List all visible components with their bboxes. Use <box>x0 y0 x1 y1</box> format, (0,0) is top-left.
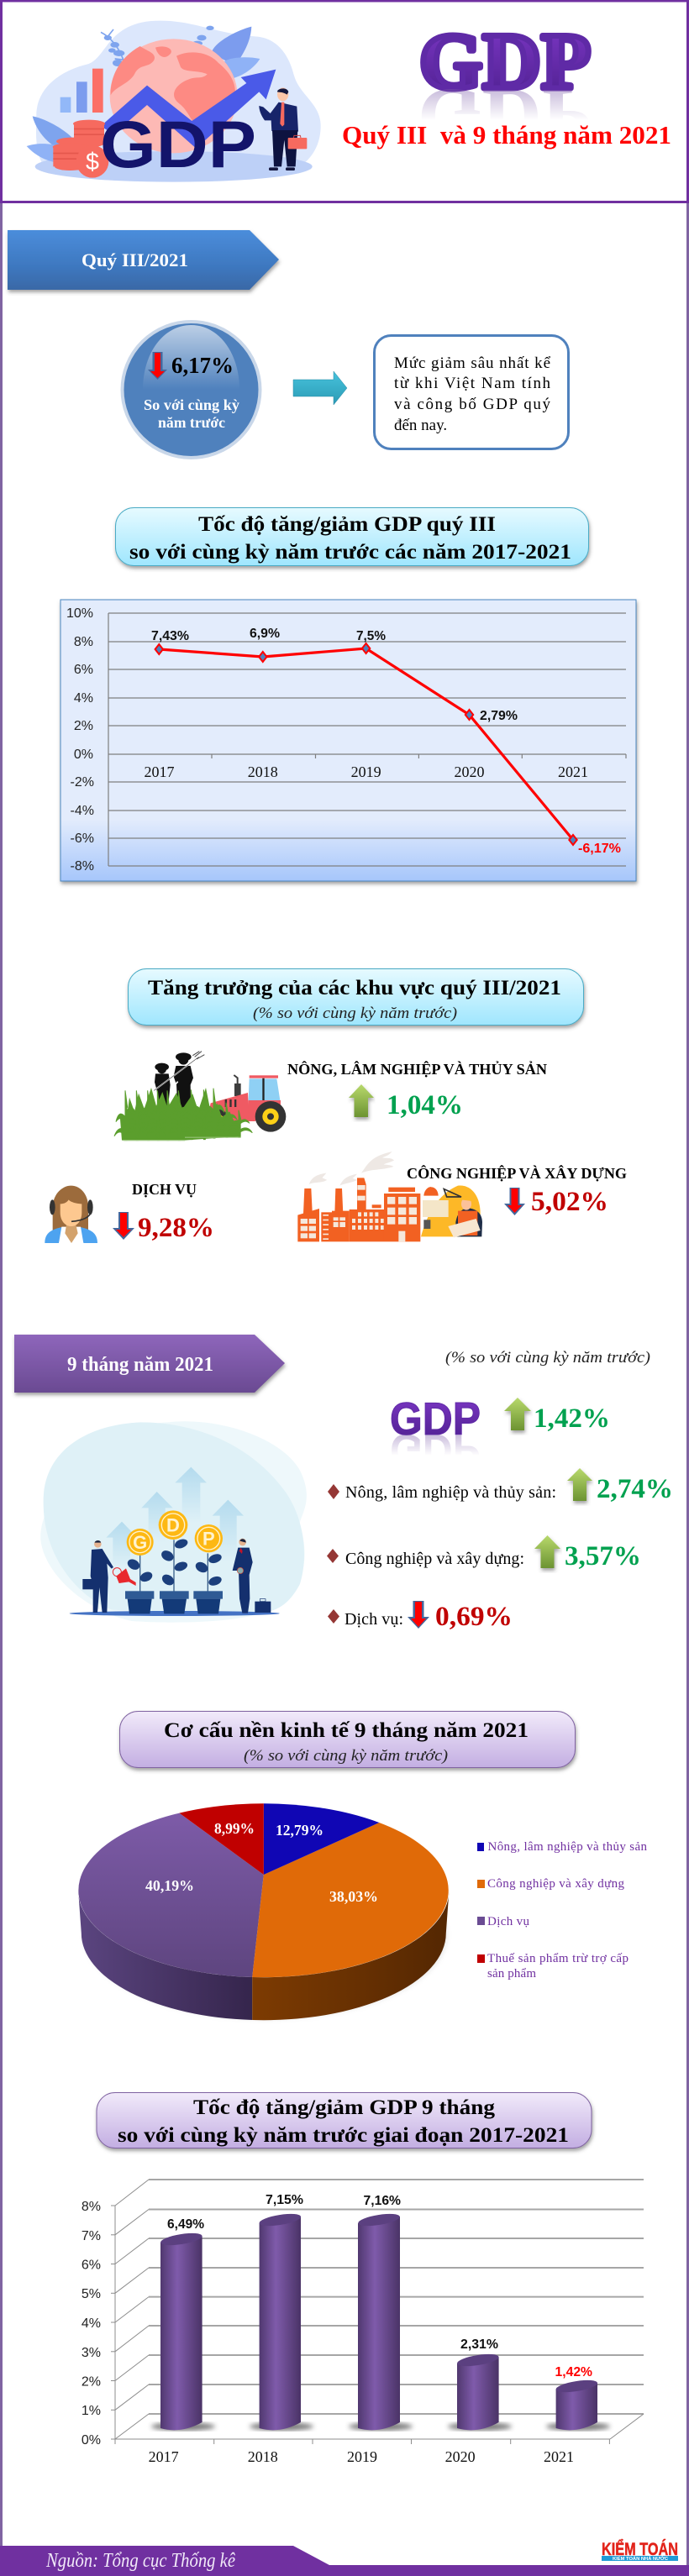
heading: economic structure: Cơ cấu nền kinh tế 9 tháng năm 2021 <box>164 1719 529 1742</box>
heading: GDP Q3 chart: Tốc độ tăng/giảm GDP quý III <box>198 513 496 536</box>
stat: industry 9 months <box>327 1535 641 1571</box>
callout box: note: từ khi Việt Nam tính <box>394 375 551 392</box>
y axis labels: -8% <box>71 859 94 874</box>
heading: sector growth: Tăng trưởng của các khu vực quý III/2021 <box>148 977 561 999</box>
heading: sector growth <box>128 969 583 1025</box>
subtitle: Quý III và 9 tháng năm 2021 <box>342 120 671 150</box>
callout: oval 6,17% <box>123 322 260 458</box>
logo: Kiểm Toán: KIỂM TOÁN NHÀ NƯỚC <box>613 2555 668 2562</box>
data labels: 6,49% <box>167 2217 204 2232</box>
data labels: 2,31% <box>460 2337 498 2352</box>
callout box: note: Mức giảm sâu nhất kể <box>394 354 551 372</box>
stat: services 9 months: 0,69% <box>435 1602 513 1632</box>
icon: up arrow <box>349 1084 374 1117</box>
x axis labels: 2021 <box>558 763 588 780</box>
y axis labels: 5% <box>82 2287 101 2301</box>
legend: pie <box>477 1840 647 1981</box>
y axis labels: 3% <box>82 2346 101 2360</box>
footer bar <box>0 2546 689 2576</box>
heading: 9-month GDP chart <box>97 2093 592 2148</box>
legend: pie: Nông, lâm nghiệp và thủy sản <box>487 1840 647 1854</box>
legend: pie: Thuế sản phẩm trừ trợ cấp <box>487 1952 629 1965</box>
data labels <box>151 627 621 856</box>
icon: factory and engineer <box>297 1152 482 1241</box>
data labels: 6,9% <box>250 627 280 641</box>
y axis labels: 0% <box>82 2433 101 2447</box>
caption: So với cùng kỳ <box>144 396 239 413</box>
y axis labels <box>66 606 94 874</box>
x axis labels: 2018 <box>248 2448 278 2465</box>
x axis labels: 2020 <box>445 2448 476 2465</box>
line chart: GDP Q3 2017-2021 <box>60 600 636 881</box>
value: 1,04% <box>387 1090 463 1120</box>
legend: pie: Dịch vụ <box>487 1915 529 1928</box>
y axis labels: 4% <box>82 2316 101 2331</box>
GDP wordmark: GDP <box>419 17 591 106</box>
bar 2021 <box>555 2378 598 2430</box>
sector: services: DỊCH VỤ <box>132 1181 197 1198</box>
stat: industry 9 months: 3,57% <box>565 1541 641 1571</box>
y axis labels: 2% <box>74 719 93 733</box>
data labels: 7,15% <box>266 2193 303 2207</box>
callout box: note: và công bố GDP quý <box>394 396 551 413</box>
legend: pie: Công nghiệp và xây dựng <box>487 1877 625 1891</box>
pie chart: economic structure <box>78 1803 449 2020</box>
section tag: Quý III/2021: Quý III/2021 <box>82 249 188 270</box>
heading: economic structure: (% so với cùng kỳ năm trước) <box>244 1747 448 1765</box>
data labels: 1,42% <box>555 2365 592 2379</box>
stat: GDP 1,42% <box>504 1398 610 1434</box>
x axis labels: 2017 <box>149 2448 179 2465</box>
callout: oval 6,17%: năm trước <box>158 414 225 431</box>
value: 6,17% <box>171 353 234 378</box>
stat: agriculture 9 months: Nông, lâm nghiệp và thủy sản: <box>345 1483 556 1502</box>
callout box: note: đến nay. <box>394 417 447 434</box>
x axis labels: 2020 <box>454 763 484 780</box>
sector: services <box>113 1181 214 1243</box>
arrow: teal <box>293 371 347 405</box>
x axis labels: 2018 <box>248 763 278 780</box>
icon: down arrow <box>113 1212 134 1240</box>
data labels: 7,16% <box>363 2194 401 2208</box>
heading: GDP Q3 chart: so với cùng kỳ năm trước các năm 2017-2021 <box>129 541 571 564</box>
3D bar chart: GDP 9 months <box>82 2180 644 2465</box>
GDP wordmark small: GDP <box>390 1393 481 1445</box>
heading: 9-month GDP chart: Tốc độ tăng/giảm GDP 9 tháng <box>193 2096 496 2119</box>
bar 2018 <box>259 2211 302 2430</box>
icon: call centre agent <box>45 1186 97 1243</box>
slice labels: 40,19% <box>145 1877 194 1894</box>
y axis labels: 6% <box>82 2258 101 2273</box>
coin letters: G <box>133 1532 147 1553</box>
x axis labels: 2017 <box>145 763 175 780</box>
section tag: 9 tháng năm 2021 <box>14 1335 285 1393</box>
section tag: Quý III/2021 <box>8 230 279 290</box>
sector: industry: CÔNG NGHIỆP VÀ XÂY DỰNG <box>407 1164 627 1182</box>
bar 2020 <box>456 2352 499 2430</box>
heading: GDP Q3 chart <box>116 507 588 566</box>
heading: sector growth: (% so với cùng kỳ năm trước) <box>253 1005 457 1022</box>
y axis labels: 8% <box>82 2200 101 2214</box>
y axis labels: 2% <box>82 2375 101 2389</box>
icon: down arrow <box>148 352 167 380</box>
illustration: GDP hero <box>27 21 321 182</box>
stat: services 9 months: Dịch vụ: <box>344 1610 403 1629</box>
stat: agriculture 9 months: 2,74% <box>597 1474 673 1504</box>
note: comparison basis: (% so với cùng kỳ năm trước) <box>445 1349 650 1367</box>
heading: 9-month GDP chart: so với cùng kỳ năm trước giai đoạn 2017-2021 <box>118 2124 569 2147</box>
y axis labels: 4% <box>74 691 93 706</box>
y axis labels: 8% <box>74 635 93 649</box>
value: 5,02% <box>531 1187 608 1217</box>
stat: agriculture 9 months <box>328 1468 673 1504</box>
heading: economic structure <box>119 1712 575 1767</box>
hero coin symbol: $ <box>86 149 99 176</box>
slice labels: 38,03% <box>329 1888 378 1905</box>
data labels: 2,79% <box>480 709 518 723</box>
stat: GDP 1,42%: 1,42% <box>534 1403 610 1434</box>
coin letters: P <box>202 1529 215 1550</box>
GDP wordmark small <box>390 1393 481 1477</box>
source: Nguồn: Tổng cục Thống kê <box>45 2550 235 2572</box>
x axis labels: 2019 <box>351 763 381 780</box>
callout box: note <box>375 336 568 449</box>
y axis labels: -4% <box>71 804 94 818</box>
y axis labels: 10% <box>66 606 93 621</box>
stat: services 9 months <box>328 1601 513 1632</box>
coin letters <box>133 1515 215 1553</box>
x axis labels: 2021 <box>544 2448 574 2465</box>
x axis labels <box>149 2448 574 2465</box>
bar 2019 <box>357 2211 401 2430</box>
y axis labels: 0% <box>74 748 93 762</box>
icon: farmers and tractor <box>114 1052 286 1141</box>
hero wordmark: GDP <box>100 108 256 181</box>
sector: agriculture <box>287 1060 547 1120</box>
x axis labels <box>145 763 588 780</box>
header panel <box>2 1 687 202</box>
legend: pie: sản phẩm <box>487 1967 536 1981</box>
y axis labels: 6% <box>74 663 93 677</box>
y axis labels: 7% <box>82 2229 101 2243</box>
sector: industry <box>407 1164 627 1217</box>
y axis labels: -6% <box>71 832 94 846</box>
stat: industry 9 months: Công nghiệp và xây dựng: <box>345 1550 524 1568</box>
slice labels: 12,79% <box>276 1822 323 1839</box>
bar shadows <box>151 2422 610 2431</box>
data line <box>159 648 573 840</box>
bar 2017 <box>160 2231 202 2430</box>
y axis labels: -2% <box>71 775 94 790</box>
data labels: -6,17% <box>578 842 621 856</box>
data labels: 7,43% <box>151 629 189 643</box>
slice labels <box>145 1820 378 1905</box>
x axis labels: 2019 <box>347 2448 377 2465</box>
y axis labels: 1% <box>82 2404 101 2418</box>
icon: down arrow <box>504 1188 525 1215</box>
coin letters: D <box>166 1515 180 1536</box>
data labels: 7,5% <box>356 629 386 643</box>
GDP wordmark reflection: GDP <box>418 72 592 162</box>
y axis labels <box>82 2200 101 2447</box>
data labels <box>167 2193 592 2379</box>
value: 9,28% <box>138 1213 214 1243</box>
GDP wordmark small: GDP <box>390 1424 481 1477</box>
section tag: 9 tháng năm 2021: 9 tháng năm 2021 <box>67 1354 213 1376</box>
sector: agriculture: NÔNG, LÂM NGHIỆP VÀ THỦY SẢN <box>287 1060 547 1078</box>
slice labels: 8,99% <box>214 1820 255 1837</box>
illustration: GDP plants <box>40 1421 307 1623</box>
